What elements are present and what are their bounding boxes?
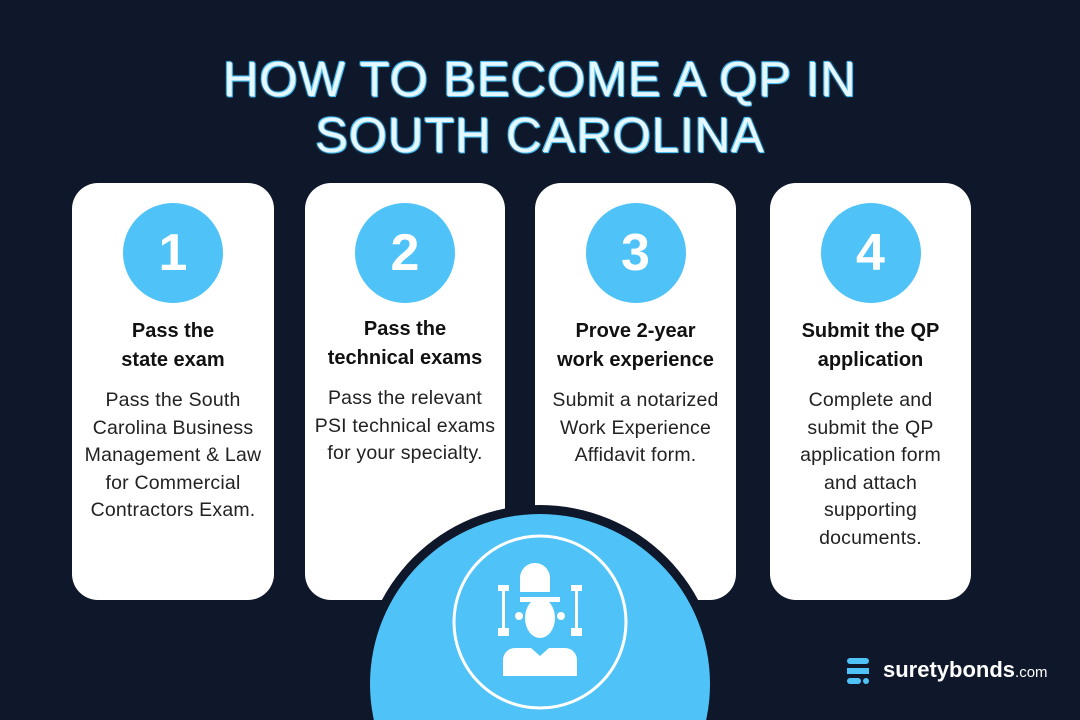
card 2: technical exams: [328, 347, 482, 369]
card 2: [305, 183, 505, 600]
card 2: Pass the: [364, 318, 446, 340]
title: SOUTH CAROLINA: [315, 109, 765, 163]
card 1: 1: [159, 224, 187, 282]
card 4: application form: [800, 444, 941, 466]
card 1: [72, 183, 274, 600]
card 4: Complete and: [809, 389, 932, 411]
card 3: Submit a notarized: [552, 389, 719, 411]
card 1: state exam: [121, 349, 225, 371]
card 4: and attach: [824, 472, 917, 494]
card 3: 3: [621, 224, 650, 282]
title: [223, 53, 857, 163]
logo: suretybonds.com: [883, 657, 1048, 682]
card 3: Prove 2-year: [575, 320, 696, 342]
title: HOW TO BECOME A QP IN: [223, 53, 857, 107]
card 1: Pass the South: [105, 389, 241, 411]
card 4: Submit the QP: [802, 320, 939, 342]
card 1: Carolina Business: [93, 416, 253, 438]
card 3: work experience: [557, 349, 714, 371]
card 2: Pass the relevant: [328, 387, 482, 409]
card 4: application: [818, 349, 923, 371]
card 4: 4: [856, 224, 885, 282]
card 1: Contractors Exam.: [91, 499, 255, 521]
card 4: submit the QP: [807, 416, 934, 438]
card 3: Work Experience: [560, 416, 711, 438]
card 2: 2: [391, 224, 419, 282]
card 4: documents.: [819, 526, 922, 548]
card 1: for Commercial: [106, 472, 240, 494]
card 3: Affidavit form.: [575, 444, 696, 466]
card 2: for your specialty.: [327, 442, 483, 464]
card 1: Pass the: [132, 320, 214, 342]
card 4: supporting: [824, 499, 917, 521]
card 2: PSI technical exams: [315, 414, 495, 436]
card 1: Management & Law: [85, 444, 261, 466]
card 4: [770, 183, 971, 600]
card 3: [535, 183, 736, 600]
